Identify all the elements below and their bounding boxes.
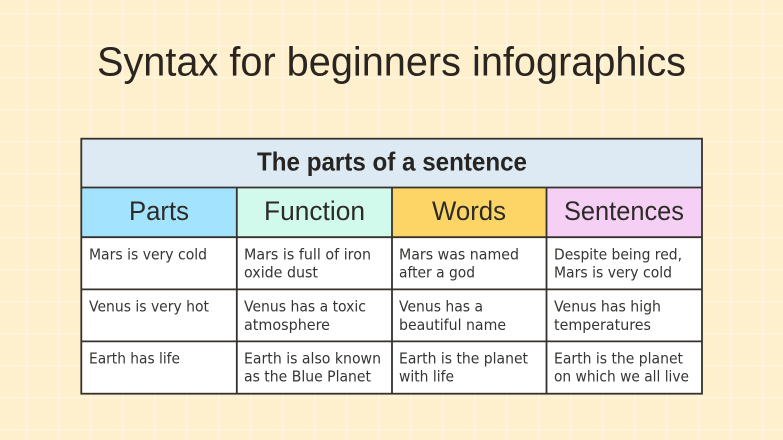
row: Mars	[89, 245, 682, 282]
column header: Sentences: Sentences	[564, 196, 684, 226]
row: Mars: after a god	[399, 264, 475, 282]
column header: Sentences	[546, 188, 702, 238]
row: Earth: with life	[399, 368, 454, 386]
row: Mars: Mars is full of iron	[244, 245, 371, 263]
row: Earth: Earth is the planet	[399, 349, 528, 367]
table heading band	[81, 138, 702, 188]
table: the parts of a sentence	[81, 138, 702, 394]
body cells background	[81, 238, 702, 394]
column header: Function: Function	[264, 196, 365, 226]
row: Venus: Venus has high	[554, 298, 661, 316]
row: Mars: oxide dust	[244, 264, 318, 282]
column header: Parts	[81, 188, 237, 238]
column header: Words	[392, 188, 546, 238]
row: Earth: as the Blue Planet	[244, 368, 371, 386]
row: Venus: Venus is very hot	[89, 298, 209, 316]
row: Venus: Venus has a toxic	[244, 298, 366, 316]
row: Earth: Earth has life	[89, 349, 180, 367]
row: Earth	[89, 349, 689, 386]
table heading band: The parts of a sentence	[257, 147, 527, 177]
row: Earth: Earth is the planet	[554, 349, 683, 367]
table grid lines	[81, 139, 702, 394]
column header: Parts: Parts	[129, 196, 189, 226]
row: Venus: Venus has a	[399, 298, 483, 316]
row: Venus	[89, 298, 661, 334]
row: Mars: Despite being red,	[554, 245, 682, 263]
row: Venus: atmosphere	[244, 316, 330, 334]
row: Mars: Mars is very cold	[89, 245, 207, 263]
row: Mars: Mars is very cold	[554, 264, 672, 282]
row: Mars: Mars was named	[399, 245, 519, 263]
row: Earth: Earth is also known	[244, 349, 381, 367]
row: Venus: beautiful name	[399, 316, 506, 334]
column header: Words: Words	[432, 196, 506, 226]
row: Venus: temperatures	[554, 316, 651, 334]
title: Syntax for beginners infographics	[97, 38, 686, 84]
column header: Function	[237, 188, 392, 238]
row: Earth: on which we all live	[554, 368, 689, 386]
